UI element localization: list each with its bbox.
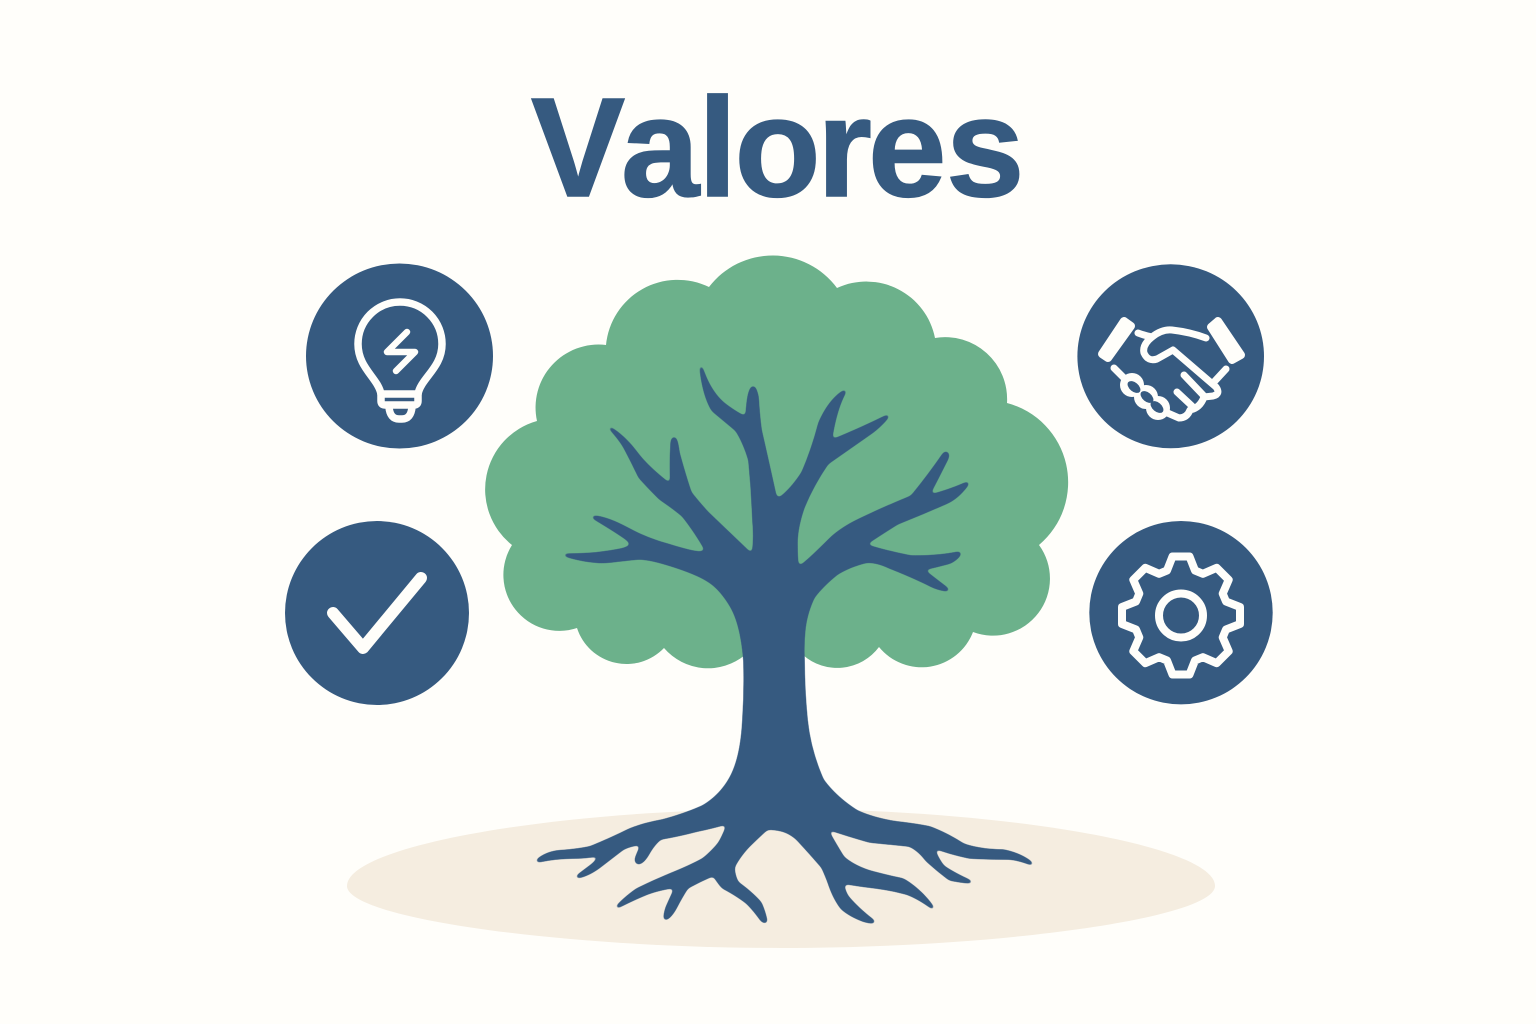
icon: check mark — [285, 521, 469, 705]
tree canopy — [485, 255, 1068, 668]
icon: light bulb — [306, 264, 493, 448]
ground ellipse — [347, 809, 1215, 948]
tree trunk, branches and roots — [537, 367, 1032, 922]
icon: handshake — [1077, 264, 1264, 448]
icon: gear — [1089, 521, 1273, 704]
title: Valores — [531, 68, 1024, 226]
